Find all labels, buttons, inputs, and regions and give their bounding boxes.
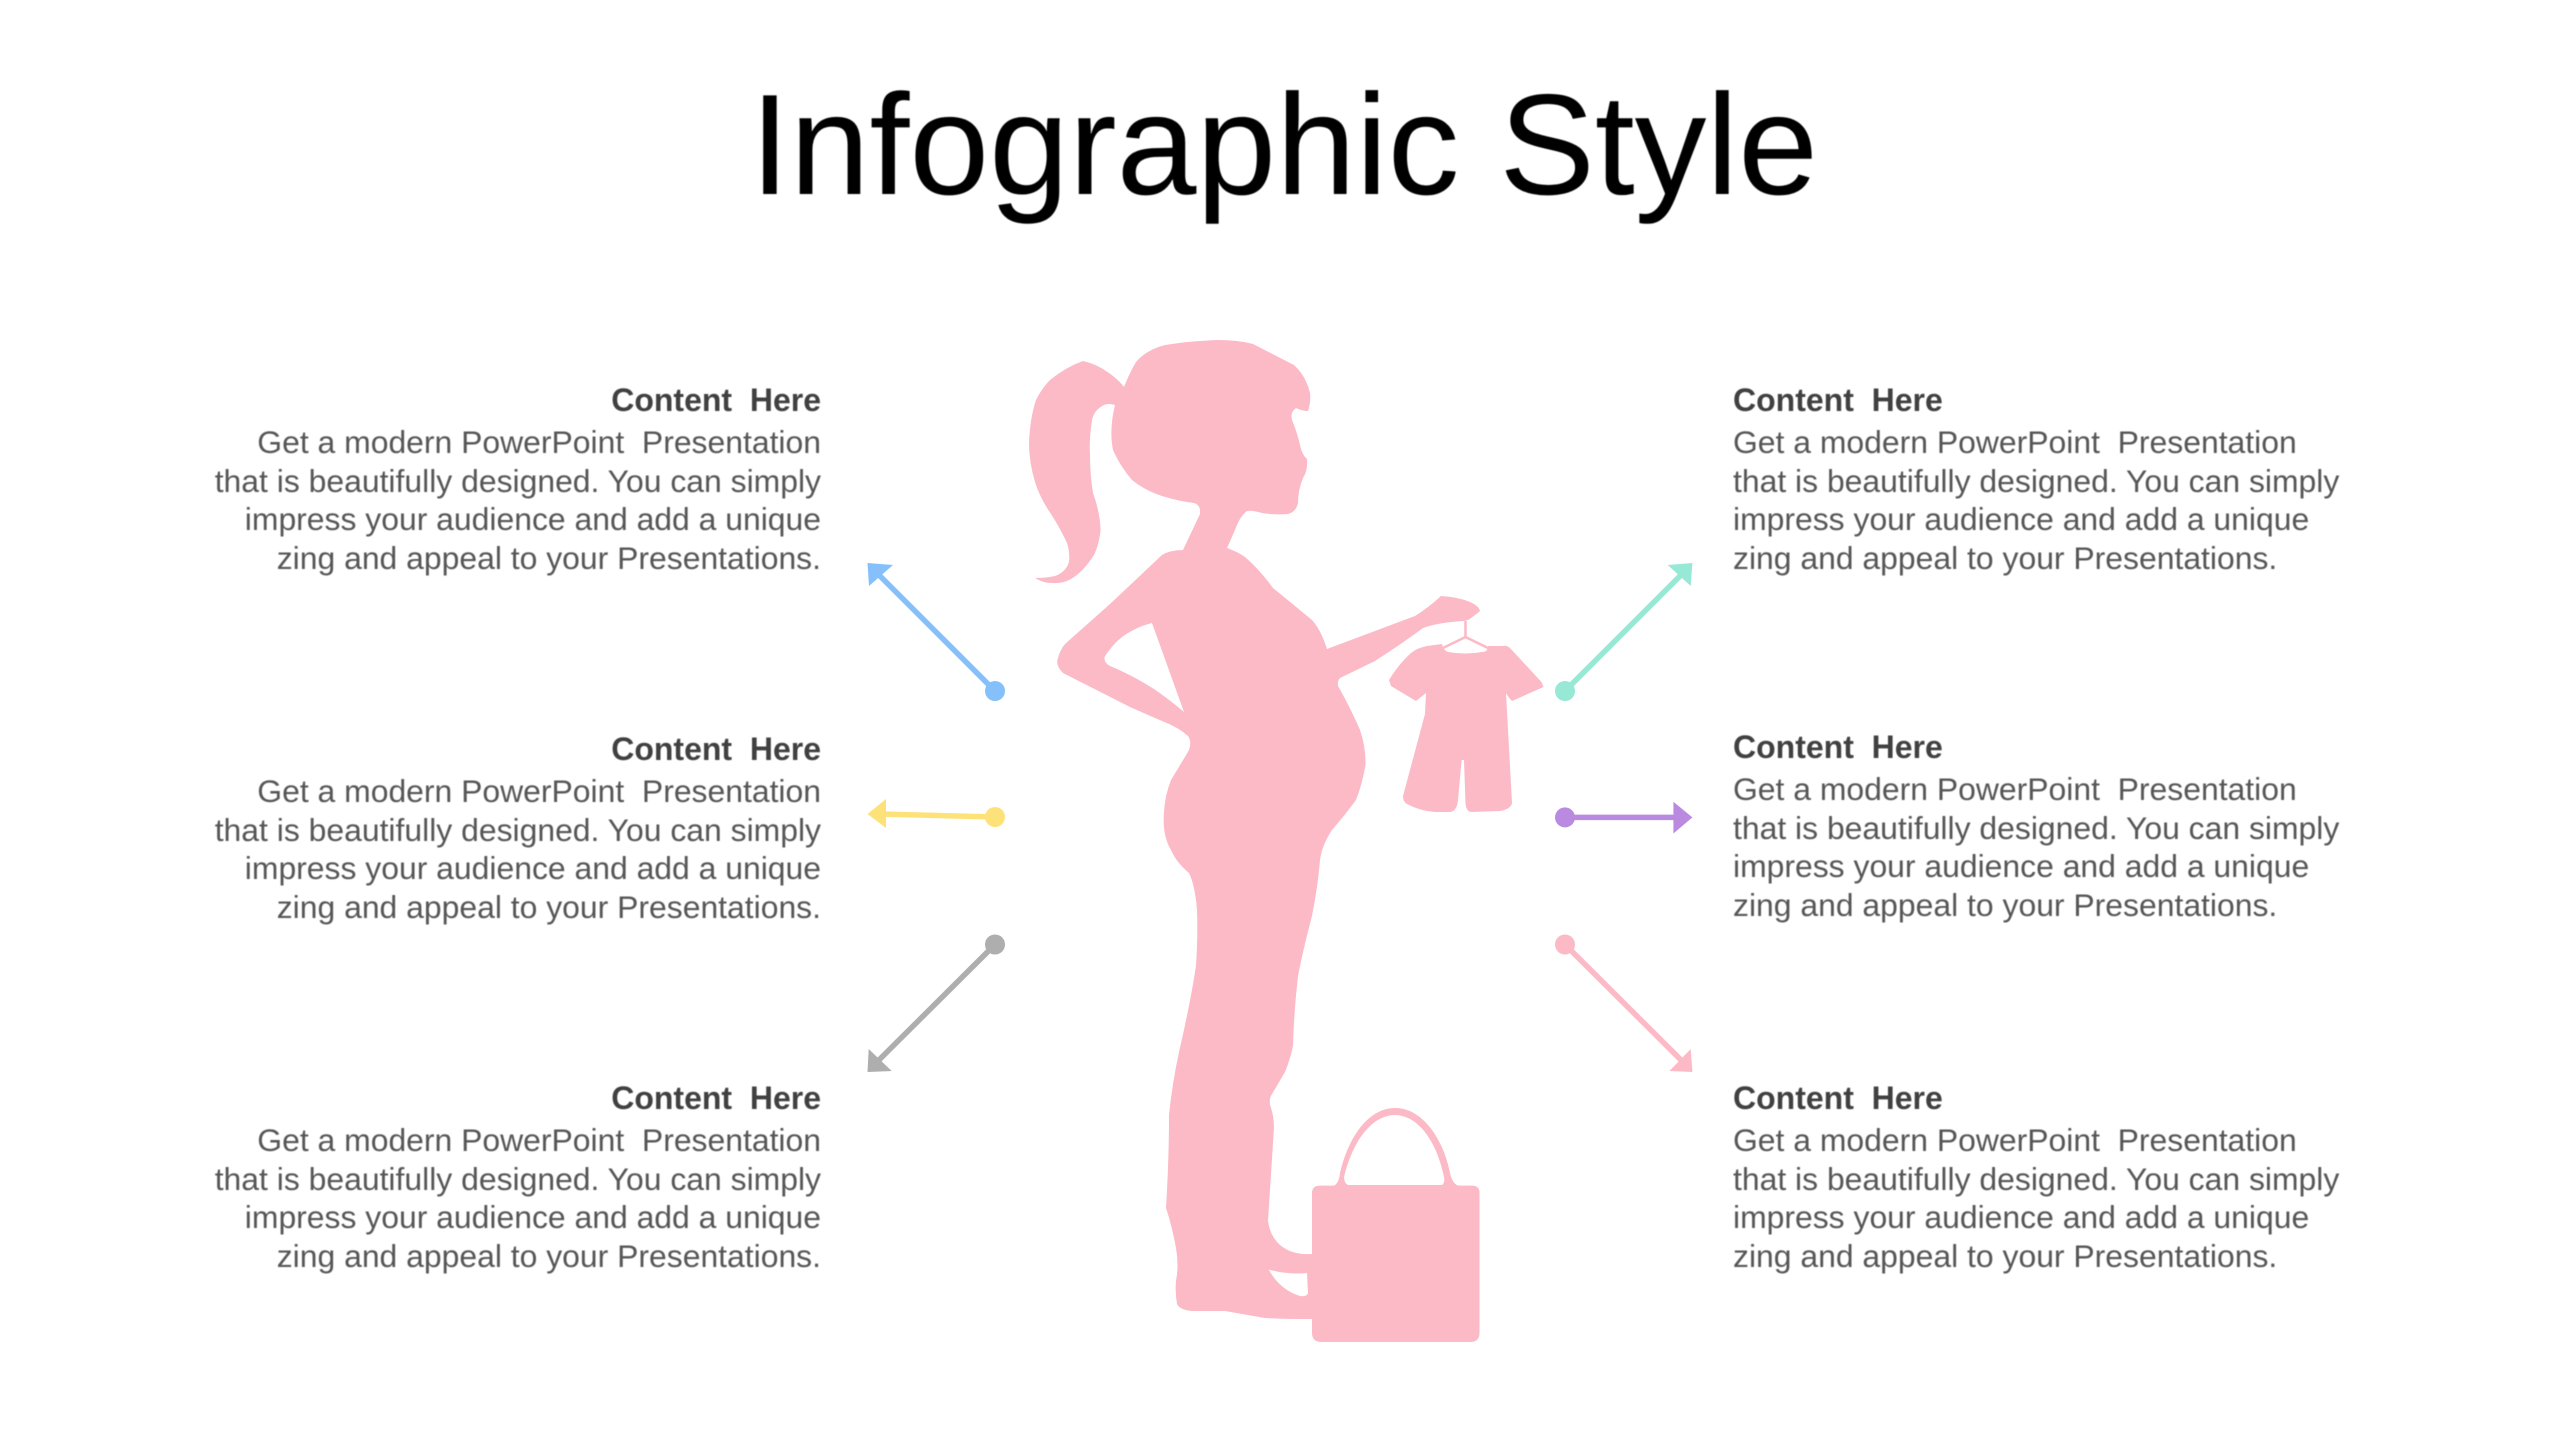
heading: bottom left: Content Here bbox=[611, 1080, 821, 1116]
illustration: pregnant woman silhouette bbox=[1029, 340, 1544, 1342]
body: bottom right: Get a modern PowerPoint Presentation that is beautifully designed. You can simply impress your audience and add a unique zing and appeal to your Presentations. bbox=[1733, 1122, 2339, 1274]
body: middle left: Get a modern PowerPoint Presentation that is beautifully designed. You can simply impress your audience and add a unique zing and appeal to your Presentations. bbox=[215, 773, 821, 925]
hanger bbox=[1443, 621, 1488, 648]
heading: middle left: Content Here bbox=[611, 731, 821, 767]
arrow: green up-right bbox=[1555, 563, 1692, 701]
shopping bag bbox=[1312, 1108, 1480, 1342]
shirt on hanger bbox=[1389, 621, 1544, 812]
text block: bottom right bbox=[1732, 1080, 2340, 1274]
arrow: gray down-left bbox=[868, 934, 1005, 1072]
heading: top left: Content Here bbox=[611, 382, 821, 418]
arrow: purple right bbox=[1555, 802, 1692, 834]
body: middle right: Get a modern PowerPoint Presentation that is beautifully designed. You can simply impress your audience and add a unique zing and appeal to your Presentations. bbox=[1733, 771, 2339, 923]
heading: bottom right: Content Here bbox=[1733, 1080, 1943, 1116]
arrow: pink down-right bbox=[1555, 934, 1692, 1072]
text block: middle right bbox=[1732, 729, 2340, 924]
heading: middle right: Content Here bbox=[1733, 729, 1943, 765]
text block: top right bbox=[1732, 382, 2340, 576]
woman bbox=[1029, 340, 1480, 1319]
text block: top left bbox=[214, 382, 822, 576]
body: bottom left: Get a modern PowerPoint Presentation that is beautifully designed. You can simply impress your audience and add a unique zing and appeal to your Presentations. bbox=[215, 1122, 821, 1274]
arrow: yellow left bbox=[868, 799, 1005, 828]
body: top left: Get a modern PowerPoint Presentation that is beautifully designed. You can simply impress your audience and add a unique zing and appeal to your Presentations. bbox=[215, 424, 821, 576]
title: Infographic Style bbox=[750, 65, 1818, 225]
text block: bottom left bbox=[214, 1080, 822, 1274]
arrow: blue up-left bbox=[868, 563, 1005, 701]
text block: middle left bbox=[214, 731, 822, 926]
heading: top right: Content Here bbox=[1733, 382, 1943, 418]
body: top right: Get a modern PowerPoint Presentation that is beautifully designed. You can simply impress your audience and add a unique zing and appeal to your Presentations. bbox=[1733, 424, 2339, 576]
